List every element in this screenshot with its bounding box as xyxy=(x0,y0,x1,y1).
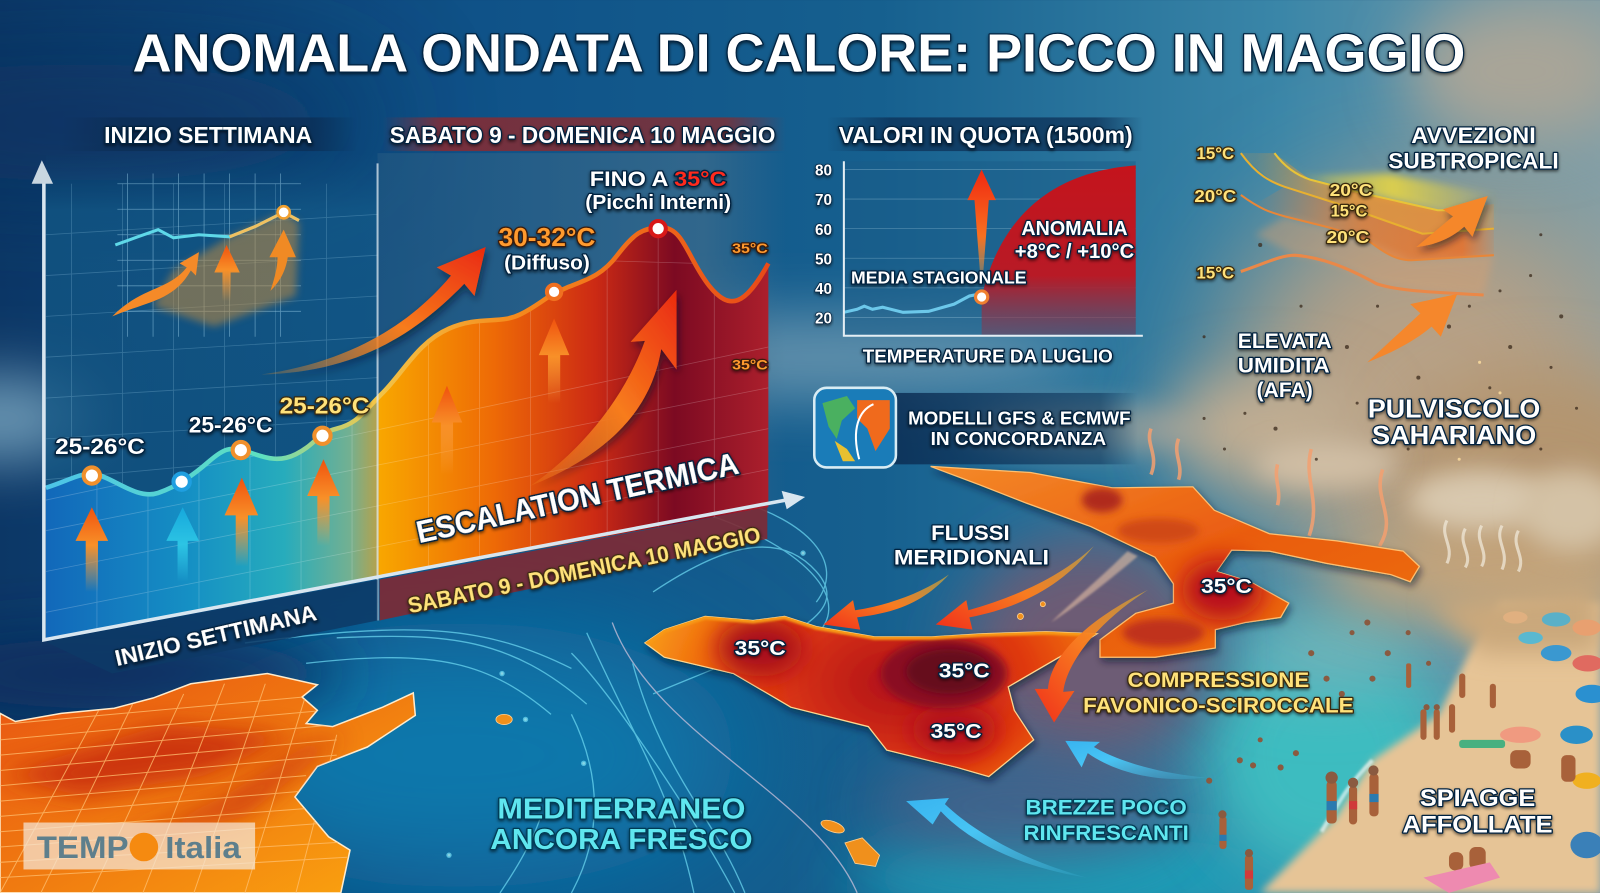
isotherm lines xyxy=(1241,153,1494,295)
plot labels: MEDIA STAGIONALE xyxy=(851,268,1027,288)
up arrow 6 xyxy=(539,318,569,403)
isotherm labels xyxy=(1194,145,1373,283)
background: saharan dust cloud xyxy=(959,0,1600,612)
axis numbers: 60 xyxy=(815,222,832,239)
axis numbers: 40 xyxy=(815,281,832,298)
map: beach and sand xyxy=(1206,582,1600,893)
label: humidity: ELEVATA xyxy=(1238,329,1332,353)
arrow: breeze 2 xyxy=(906,798,1087,878)
chart temperature labels: (Diffuso) xyxy=(504,252,590,274)
heading: VALORI IN QUOTA (1500m) xyxy=(839,122,1133,148)
map: Tunisia heat land xyxy=(0,674,415,893)
map: southern Italy: 35°C xyxy=(1201,576,1252,598)
up arrow 2 xyxy=(166,507,199,582)
beach umbrellas xyxy=(1500,611,1600,858)
icon: world map xyxy=(814,388,896,467)
panel: subtropical advections isotherms xyxy=(1194,123,1559,362)
chart temperature labels: 30-32°C xyxy=(498,224,595,252)
arrow: warm streak xyxy=(1051,551,1138,623)
label: compression: FAVONICO-SCIROCCALE xyxy=(1083,693,1354,717)
plot labels xyxy=(851,218,1134,366)
arrow: humidity flow xyxy=(1367,294,1457,362)
logo: TEMPO Italia: Italia xyxy=(165,831,242,865)
axes xyxy=(844,161,1143,336)
panel: subtropical advections isotherms: SUBTROPICALI xyxy=(1388,148,1559,173)
arrow: southern flow 1 xyxy=(823,575,949,630)
chart temperature labels: FINO A 35°C xyxy=(590,167,727,191)
icon: heat waves xyxy=(1445,520,1521,572)
long trend arrow xyxy=(261,247,486,375)
seasonal mean line xyxy=(844,294,980,312)
label: compression xyxy=(1083,668,1354,717)
chart temperature labels: 25-26°C xyxy=(189,413,272,438)
label: compression: COMPRESSIONE xyxy=(1128,668,1309,692)
label: humidity xyxy=(1238,329,1332,402)
label: breezes: RINFRESCANTI xyxy=(1023,821,1189,845)
anomaly arrow xyxy=(967,169,996,281)
isotherm labels: 20°C xyxy=(1330,180,1373,200)
plot labels: +8°C / +10°C xyxy=(1015,241,1134,263)
map: Sicily: 35°C xyxy=(735,638,786,660)
chart temperature labels: (Picchi Interni) xyxy=(585,192,731,214)
label: humidity: UMIDITA xyxy=(1238,354,1330,378)
arrow: subtropical flow xyxy=(1416,196,1488,247)
chart temperature labels xyxy=(55,167,768,459)
temperature curve xyxy=(46,228,768,494)
inset mini chart xyxy=(112,174,301,337)
map: southern Italy xyxy=(931,466,1419,657)
isotherm bands xyxy=(1241,153,1494,295)
chart footer and escalation labels xyxy=(112,445,763,671)
chart nodes xyxy=(84,221,666,490)
beach people xyxy=(1206,619,1576,893)
label: saharan dust: SAHARIANO xyxy=(1372,422,1536,450)
panel: subtropical advections isotherms: AVVEZIONI xyxy=(1411,123,1536,148)
isotherm labels: 15°C xyxy=(1331,202,1368,220)
label: breezes: BREZZE POCO xyxy=(1026,795,1187,819)
label: cool Mediterranean: ANCORA FRESCO xyxy=(490,824,753,856)
header: inizio settimana: INIZIO SETTIMANA xyxy=(104,122,312,148)
chart temperature labels: 35°C xyxy=(732,357,768,373)
arrow: breeze 1 xyxy=(1065,741,1206,779)
label: crowded beaches: SPIAGGE xyxy=(1420,785,1535,812)
divider and axes xyxy=(32,160,805,640)
seasonal point xyxy=(976,291,988,303)
axis numbers: 80 xyxy=(815,163,832,180)
panel shade xyxy=(46,153,378,640)
panel: forecast models: IN CONCORDANZA xyxy=(931,428,1106,449)
up arrow 4 xyxy=(307,459,340,546)
axis numbers: 50 xyxy=(815,251,832,268)
label: cool Mediterranean: MEDITERRANEO xyxy=(497,793,745,825)
axis numbers: 70 xyxy=(815,192,832,209)
label: southern flows: MERIDIONALI xyxy=(894,545,1049,569)
panel: temperature escalation chart xyxy=(32,153,805,674)
up arrow 1 xyxy=(76,507,108,592)
map: Sicily: 35°C xyxy=(931,721,982,743)
area under curve xyxy=(46,228,768,638)
axis numbers: 20 xyxy=(815,311,832,328)
chart footer and escalation labels: SABATO 9 - DOMENICA 10 MAGGIO xyxy=(406,522,763,618)
map: Sicily: 35°C xyxy=(939,661,990,683)
chart temperature labels: 25-26°C xyxy=(55,434,145,459)
panel: forecast models: MODELLI GFS & ECMWF xyxy=(908,408,1131,429)
header: weekend: SABATO 9 - DOMENICA 10 MAGGIO xyxy=(390,122,776,148)
arrow: southern flow 2 xyxy=(936,546,1094,630)
anomaly area xyxy=(982,165,1136,335)
label: crowded beaches: AFFOLLATE xyxy=(1403,812,1553,839)
label: cool Mediterranean xyxy=(490,793,753,856)
plot background xyxy=(844,161,1136,335)
chart footer and escalation labels: INIZIO SETTIMANA xyxy=(112,600,319,671)
plot labels: TEMPERATURE DA LUGLIO xyxy=(863,345,1113,366)
icon: heat flames xyxy=(1149,429,1386,546)
map: Malta and islets xyxy=(496,602,1045,866)
map: Sicily xyxy=(645,616,1097,777)
label: saharan dust xyxy=(1368,395,1540,450)
title: ANOMALA ONDATA DI CALORE: PICCO IN MAGGIO xyxy=(133,24,1465,84)
up arrow 5 xyxy=(432,386,462,475)
isotherm labels: 15°C xyxy=(1196,265,1234,283)
up arrow 3 xyxy=(224,478,258,566)
label: southern flows xyxy=(894,521,1049,569)
label: breezes xyxy=(1023,795,1189,845)
label: southern flows: FLUSSI xyxy=(931,521,1010,545)
band: inizio settimana footer xyxy=(46,580,378,674)
chart footer and escalation labels: ESCALATION TERMICA xyxy=(413,445,742,550)
label: saharan dust: PULVISCOLO xyxy=(1368,395,1540,423)
logo: TEMPO Italia: TEMP xyxy=(37,829,129,865)
isotherm labels: 20°C xyxy=(1327,227,1370,247)
panel: values at 1500 m xyxy=(815,117,1143,366)
arrow: sirocco compression xyxy=(1035,590,1148,723)
label: crowded beaches xyxy=(1403,785,1553,839)
big escalation arrow xyxy=(531,290,677,486)
chart temperature labels: 25-26°C xyxy=(280,392,369,418)
band: weekend footer xyxy=(380,507,767,620)
plot labels: ANOMALIA xyxy=(1021,218,1128,240)
label: humidity: (AFA) xyxy=(1257,378,1313,402)
isotherm labels: 20°C xyxy=(1194,186,1237,206)
sea current streamlines xyxy=(245,500,857,893)
chart grid xyxy=(46,184,378,633)
chart temperature labels: 35°C xyxy=(732,241,768,257)
panel: forecast models xyxy=(814,388,1138,467)
isotherm labels: 15°C xyxy=(1196,145,1234,163)
logo: TEMPO Italia xyxy=(23,823,255,869)
header: inizio settimana xyxy=(61,117,357,151)
axis numbers xyxy=(815,163,832,328)
